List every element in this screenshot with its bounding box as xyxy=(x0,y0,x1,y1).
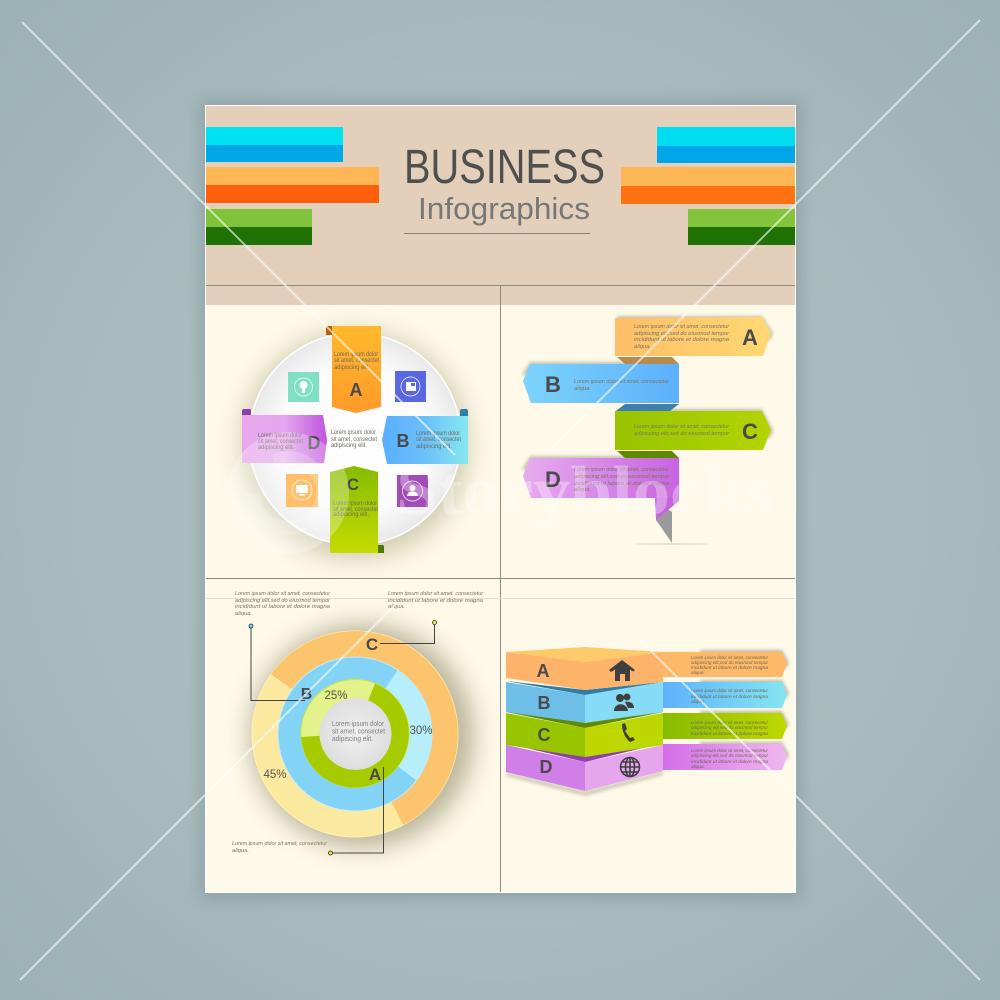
title rule xyxy=(404,233,590,234)
panel: circular ribbon diagram xyxy=(241,326,469,559)
leader A xyxy=(328,765,384,855)
caption top right: aliqua. xyxy=(388,604,405,610)
ribbon C: C xyxy=(347,475,359,494)
step D: D xyxy=(545,467,561,492)
ribbon B: Lorem ipsum dolor xyxy=(416,430,461,437)
ribbon B: sit amet, consectet xyxy=(416,436,461,443)
layer D: incididunt ut labore et dolore magna xyxy=(691,759,768,765)
ribbon D: sit amet, consectet xyxy=(258,438,303,445)
left colour bars xyxy=(206,127,379,245)
page xyxy=(206,106,796,892)
ribbon D: Lorem ipsum dolor xyxy=(258,432,303,439)
step A: Lorem ipsum dolor sit amet, consectetur xyxy=(634,324,730,330)
layer D: adipiscing elit,sed do eiusmod tempor xyxy=(691,753,768,759)
caption top left: Lorem ipsum dolor sit amet, consectetur xyxy=(235,591,331,597)
layer A xyxy=(506,647,787,690)
caption top right: Lorem ipsum dolor sit amet, consectetur xyxy=(388,591,484,597)
ribbon A xyxy=(326,326,381,413)
step A: aliqua. xyxy=(634,344,651,350)
leader A: A xyxy=(369,765,381,784)
caption top right: incididunt ut labore et dolore magna xyxy=(388,598,483,604)
caption top right xyxy=(388,591,484,610)
right colour bars xyxy=(621,127,795,245)
disc xyxy=(249,333,461,545)
layer B: aliqua. xyxy=(691,699,705,705)
ribbon A: A xyxy=(350,380,362,400)
page shadow xyxy=(200,100,802,900)
caption bottom: Lorem ipsum dolor sit amet, consectetur xyxy=(232,841,328,847)
step C xyxy=(615,411,771,450)
step D xyxy=(523,458,679,498)
step A: A xyxy=(742,325,758,350)
step A xyxy=(615,317,771,356)
leader B xyxy=(249,624,312,703)
layer A: A xyxy=(536,661,550,681)
centre text: adipiscing elit. xyxy=(331,442,367,449)
layer A: Lorem ipsum dolor sit amet, consectetur xyxy=(691,655,768,661)
ribbon D: adipiscing elit. xyxy=(258,444,294,451)
layer A: incididunt ut labore et dolore magna xyxy=(691,665,768,671)
ribbon A: Lorem ipsum dolor xyxy=(334,351,379,358)
folds xyxy=(616,357,679,458)
icon: light bulb xyxy=(288,372,319,402)
panel grid lines xyxy=(206,285,795,892)
icon: phone xyxy=(622,723,635,742)
centre text: Lorem ipsum dolor xyxy=(331,429,377,436)
step D: aliqua. xyxy=(574,487,591,493)
layer D: aliqua. xyxy=(691,764,705,770)
core with text: Lorem ipsum dolor xyxy=(332,719,384,728)
arrow shadows xyxy=(700,650,789,760)
ribbon A: adipiscing elit. xyxy=(334,364,370,371)
leader C xyxy=(366,620,436,654)
watermark text: Storyblocks xyxy=(396,453,774,530)
layer B: B xyxy=(538,693,550,713)
ribbon shadows xyxy=(522,316,773,470)
ribbon tail xyxy=(634,498,710,545)
layer A: adipiscing elit,sed do eiusmod tempor xyxy=(691,660,768,666)
step C: Lorem ipsum dolor sit amet, consectetur xyxy=(634,424,730,430)
ribbon C: sit amet, consectet xyxy=(333,506,378,513)
outer ring xyxy=(252,631,458,837)
layer B: Lorem ipsum dolor sit amet, consectetur xyxy=(691,688,768,694)
percent labels: 25% xyxy=(324,690,348,702)
stack shadow xyxy=(506,771,663,796)
step D: Lorem ipsum dolor sit amet, consectetur xyxy=(574,467,670,473)
core with text xyxy=(320,698,392,770)
ribbon C: Lorem ipsum dolor xyxy=(333,500,378,507)
icon: house xyxy=(609,660,635,681)
percent labels: 30% xyxy=(409,725,433,737)
step C: adipiscing elit,sed do eiusmod tempor xyxy=(634,431,730,437)
step D: incididunt ut labore et dolore magna xyxy=(574,481,669,487)
panel: header xyxy=(206,106,795,305)
step B xyxy=(523,364,679,403)
core with text: sit amet, consectet xyxy=(332,726,385,736)
disc shadow xyxy=(241,331,469,559)
middle ring xyxy=(278,657,432,811)
title: BUSINESS xyxy=(404,141,605,194)
ribbon C xyxy=(330,466,384,553)
ribbon B xyxy=(382,409,468,464)
caption top left: adipiscing elit,sed do eiusmod tempor xyxy=(235,598,331,604)
layer C: adipiscing elit,sed do eiusmod tempor xyxy=(691,725,768,731)
icon: monitor xyxy=(286,474,318,507)
centre text xyxy=(331,429,377,449)
percent labels: 45% xyxy=(263,769,287,781)
leader B: B xyxy=(301,686,312,703)
centre text: sit amet, consectet xyxy=(331,436,377,443)
layer B xyxy=(506,681,787,723)
ribbon D xyxy=(242,409,327,463)
icon: user xyxy=(397,475,428,507)
step A: adipiscing elit,sed do eiusmod tempor xyxy=(634,331,730,337)
step C: C xyxy=(742,419,758,444)
caption bottom: aliqua. xyxy=(232,848,249,854)
layer D: Lorem ipsum dolor sit amet, consectetur xyxy=(691,748,768,754)
header band xyxy=(206,106,795,305)
layer B: incididunt ut labore et dolore magna xyxy=(691,694,768,700)
chart shadow xyxy=(250,624,474,848)
ribbon B: adipiscing elit. xyxy=(416,443,452,450)
layer C: C xyxy=(538,725,550,745)
step B: aliqua. xyxy=(574,386,591,392)
panel: layered 3D stack xyxy=(506,647,789,796)
icon: globe xyxy=(620,757,640,777)
core with text: adipiscing elit. xyxy=(332,734,373,743)
ribbon A: sit amet, consectet xyxy=(334,357,379,364)
step B: B xyxy=(545,372,561,397)
layer A: aliqua. xyxy=(691,670,705,676)
watermark logo xyxy=(227,432,349,554)
layer C xyxy=(506,705,787,757)
layer D xyxy=(506,735,787,791)
caption top left: aliqua. xyxy=(235,611,252,617)
percent labels xyxy=(263,690,433,781)
icon: newspaper xyxy=(395,371,426,402)
caption bottom xyxy=(232,841,328,854)
inner ring xyxy=(301,680,409,788)
layer C: incididunt ut labore et dolore magna xyxy=(691,731,768,737)
icon: people xyxy=(614,694,634,711)
layer D: D xyxy=(540,757,552,777)
caption top left: incididunt ut labore et dolore magna xyxy=(235,604,330,610)
layer C: Lorem ipsum dolor sit amet, consectetur xyxy=(691,720,768,726)
step D: adipiscing elit,sed do eiusmod tempor xyxy=(574,474,670,480)
page sheet xyxy=(206,106,796,892)
panel: concentric donut chart xyxy=(232,591,484,855)
ribbon B: B xyxy=(396,431,410,451)
ribbon D: D xyxy=(308,433,320,453)
ribbon C: adipiscing elit. xyxy=(333,511,369,518)
step A: incididunt ut labore et dolore magna xyxy=(634,337,729,343)
leader C: C xyxy=(366,635,378,654)
subtitle: Infographics xyxy=(418,191,590,226)
panel: folded ribbon list xyxy=(522,316,773,545)
caption top left xyxy=(235,591,331,617)
step B: Lorem ipsum dolor sit amet, consectetur xyxy=(574,379,670,385)
